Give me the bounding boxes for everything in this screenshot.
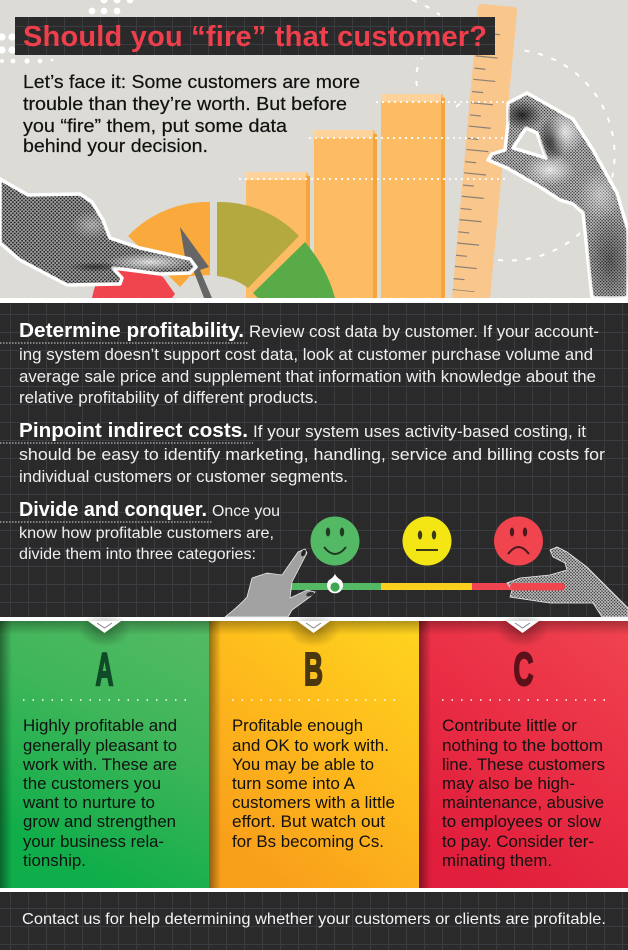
text C: minating them.: [442, 852, 552, 870]
text A: want to nurture to: [22, 794, 155, 812]
call to action: Contact us for help determining whether your customers or clients are profitable.: [22, 911, 606, 928]
text: divide and conquer: know how profitable customers are,: [19, 525, 274, 542]
text: determine profitability: average sale price and supplement that information with knowledge about the: [19, 368, 596, 386]
letter B: B: [304, 643, 323, 695]
panel: footer: [0, 892, 628, 950]
text A: grow and strengthen: [23, 813, 176, 831]
intro text: behind your decision.: [23, 136, 208, 156]
icon: neutral face: [402, 516, 452, 566]
text: divide and conquer: Once you: [212, 503, 280, 520]
ruler: [452, 4, 517, 298]
intro text: you “fire” them, put some data: [23, 116, 288, 136]
text: pinpoint indirect costs: individual customers or customer segments.: [19, 468, 348, 486]
text B: [232, 717, 395, 851]
text A: the customers you: [23, 775, 161, 793]
icon: sad face: [494, 516, 543, 566]
text: pinpoint indirect costs: should be easy to identify marketing, handling, service and billing costs for: [19, 446, 606, 464]
icon: pinching hand: [488, 93, 628, 310]
icon: pointing hand small: [225, 549, 315, 617]
dashed circle: [412, 0, 615, 261]
gauge needle: [180, 227, 212, 298]
intro text: [23, 72, 360, 156]
text C: Contribute little or: [442, 717, 578, 735]
intro text: Let’s face it: Some customers are more: [23, 72, 360, 92]
text: pinpoint indirect costs: Pinpoint indirect costs.: [19, 420, 248, 442]
text: determine profitability: relative profitability of different products.: [19, 389, 318, 407]
icon: pointing hand: [0, 179, 196, 285]
text C: to employees or slow: [442, 813, 601, 831]
text: determine profitability: [19, 320, 599, 407]
text C: to pay. Consider ter-: [442, 833, 594, 851]
panel: category B: [209, 613, 419, 888]
text: divide and conquer: divide them into three categories:: [19, 546, 256, 563]
text B: effort. But watch out: [232, 813, 385, 831]
text C: may also be high-: [442, 775, 575, 793]
text: determine profitability: Determine profitability.: [19, 320, 244, 342]
text: pinpoint indirect costs: [19, 420, 606, 486]
intro text: trouble than they’re worth. But before: [23, 94, 347, 114]
title: Should you “fire” that customer?: [23, 21, 487, 53]
text: divide and conquer: Divide and conquer.: [19, 499, 207, 521]
text: divide and conquer: [19, 499, 280, 563]
text A: generally pleasant to: [23, 737, 177, 755]
text C: nothing to the bottom: [442, 737, 603, 755]
text: determine profitability: Review cost data by customer. If your account-: [249, 323, 599, 341]
guide dotted lines: [239, 102, 510, 179]
gauge: [92, 202, 335, 298]
notch: [88, 621, 121, 633]
notch: [297, 621, 330, 633]
notch: [506, 621, 539, 633]
text A: Highly profitable and: [23, 717, 177, 735]
panel: advice section: [0, 303, 628, 617]
text: determine profitability: ing system doesn’t support cost data, look at customer purchase volume and: [19, 346, 593, 364]
text C: [442, 717, 605, 870]
text: pinpoint indirect costs: If your system uses activity-based costing, it: [253, 423, 586, 441]
letter C: C: [514, 643, 534, 695]
panel: header: [0, 0, 628, 310]
text A: tionship.: [23, 852, 86, 870]
bar chart: [246, 94, 445, 298]
icon: right hand small: [507, 547, 628, 617]
text B: turn some into A: [232, 775, 355, 793]
text B: for Bs becoming Cs.: [232, 833, 384, 851]
text C: line. These customers: [442, 756, 605, 774]
text B: You may be able to: [232, 756, 374, 774]
icon: happy face: [310, 516, 360, 566]
text A: [22, 717, 177, 870]
letter A: A: [96, 643, 114, 695]
rating slider: [291, 574, 565, 593]
decorative dots: [0, 0, 133, 64]
text B: customers with a little: [232, 794, 395, 812]
panel: category A: [0, 613, 209, 888]
text C: maintenance, abusive: [442, 794, 604, 812]
text B: Profitable enough: [232, 717, 363, 735]
panel: category C: [419, 613, 628, 888]
text A: work with. These are: [22, 756, 177, 774]
decorative dotted rules: [0, 343, 253, 522]
text B: and OK to work with.: [232, 737, 389, 755]
text A: your business rela-: [23, 833, 164, 851]
